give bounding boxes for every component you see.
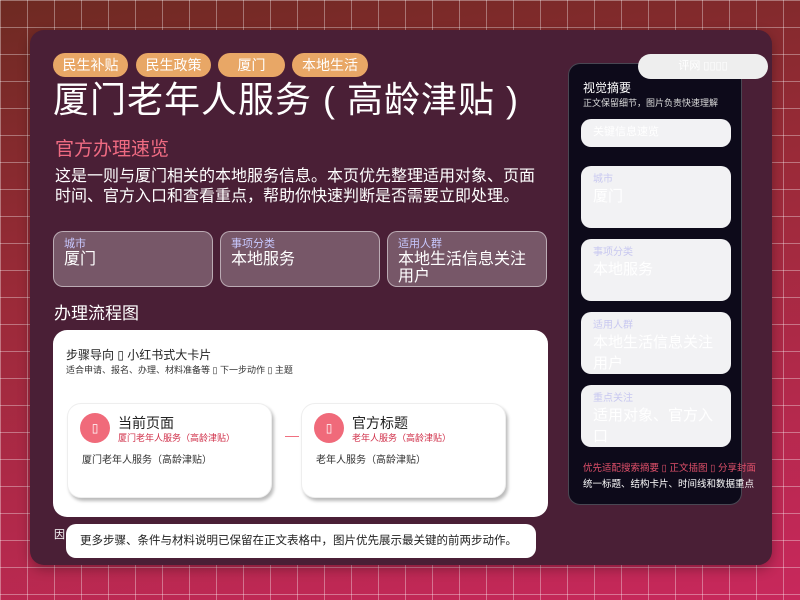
- step 1: 厦门老年人服务（高龄津贴）: [118, 433, 235, 443]
- step 1: [67, 403, 272, 498]
- top right chip: 评网 ▯▯▯▯: [678, 60, 728, 72]
- sidebar: 事项分类: [593, 247, 633, 258]
- flow heading: 办理流程图: [54, 304, 139, 323]
- main panel: 更多步骤、条件与材料说明已保留在正文表格中，图片优先展示最关键的前两步动作。: [80, 535, 517, 547]
- intro text: 这是一则与厦门相关的本地服务信息。本页优先整理适用对象、页面时间、官方入口和查看重点，帮助你快速判断是否需要立即处理。: [55, 168, 535, 205]
- tags: 民生政策: [146, 57, 202, 73]
- sidebar: 优先适配搜索摘要 ▯ 正文插图 ▯ 分享封面: [583, 463, 756, 474]
- sidebar: 本地服务: [593, 261, 653, 278]
- sidebar: 统一标题、结构卡片、时间线和数据重点: [583, 479, 754, 490]
- sidebar: 适用人群: [593, 320, 633, 331]
- title: 厦门老年人服务 ( 高龄津贴 ): [53, 79, 519, 120]
- tags: 厦门: [238, 57, 266, 73]
- step 2: 老年人服务（高龄津贴）: [316, 455, 426, 466]
- info cards: 厦门: [64, 251, 96, 268]
- step 2: ▯: [326, 421, 332, 435]
- info cards: [53, 231, 547, 287]
- flow panel: [53, 330, 548, 517]
- subtitle: 官方办理速览: [55, 139, 169, 160]
- flow panel: 步骤导向 ▯ 小红书式大卡片: [66, 348, 211, 362]
- footnote: 因: [54, 529, 65, 541]
- tags: 本地生活: [302, 57, 358, 73]
- step 1: 厦门老年人服务（高龄津贴）: [82, 455, 212, 466]
- info cards: 适用人群: [398, 238, 442, 250]
- step 1: 当前页面: [118, 415, 174, 431]
- sidebar: 正文保留细节，图片负责快速理解: [583, 98, 718, 108]
- sidebar: [568, 63, 742, 505]
- sidebar: 本地生活信息关注用户: [593, 334, 713, 372]
- flow panel: 适合申请、报名、办理、材料准备等 ▯ 下一步动作 ▯ 主题: [66, 365, 293, 375]
- step 2: 官方标题: [352, 415, 408, 431]
- sidebar: 关键信息速览: [593, 126, 659, 138]
- step 1: ▯: [92, 421, 98, 435]
- arrow: [285, 436, 299, 437]
- sidebar: 适用对象、官方入口: [593, 407, 713, 445]
- sidebar: 城市: [593, 174, 613, 185]
- info cards: 本地服务: [231, 251, 295, 268]
- tags: 民生补贴: [62, 57, 118, 73]
- top right chip: [638, 54, 768, 79]
- step 2: [301, 403, 506, 498]
- info cards: 城市: [64, 238, 86, 250]
- sidebar: 重点关注: [593, 393, 633, 404]
- tags: [53, 53, 368, 77]
- info cards: 事项分类: [231, 238, 275, 250]
- sidebar: 视觉摘要: [583, 81, 631, 95]
- sidebar: 厦门: [593, 188, 623, 205]
- step 2: 老年人服务（高龄津贴）: [352, 433, 451, 443]
- info cards: 本地生活信息关注用户: [398, 251, 526, 285]
